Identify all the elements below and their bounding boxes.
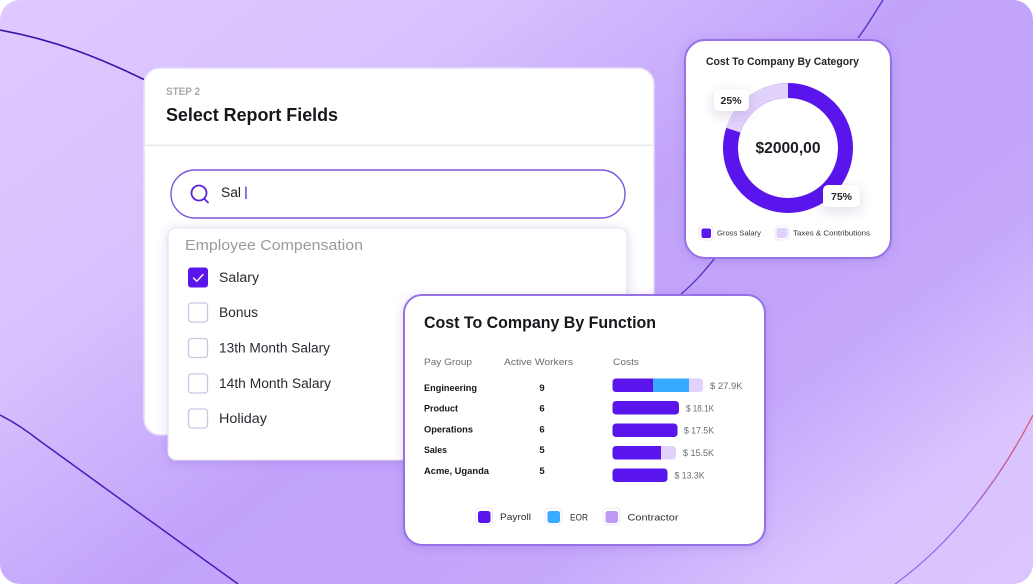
curve: top right line xyxy=(680,0,883,295)
cost values: $ 15.5K xyxy=(683,448,715,459)
pay group names: Operations xyxy=(424,424,473,434)
active worker counts xyxy=(539,383,545,477)
legend: gross salary xyxy=(699,226,761,240)
option: holiday xyxy=(188,409,267,428)
legend: payroll: Payroll xyxy=(500,512,531,523)
option: 13th month salary xyxy=(188,338,330,358)
pay group names: Sales xyxy=(424,445,447,455)
step label: STEP 2 xyxy=(166,86,200,98)
option: bonus: Bonus xyxy=(219,305,258,320)
active worker counts: 6 xyxy=(539,404,545,414)
cost values: $ 13.3K xyxy=(674,470,705,482)
curve: top left line xyxy=(0,30,145,80)
legend: contractor: Contractor xyxy=(628,512,678,524)
option: 14th month salary xyxy=(188,374,331,393)
pay group names: Product xyxy=(424,404,458,414)
legend: taxes and contributions: Taxes & Contributions xyxy=(793,228,870,238)
bar chart: costs xyxy=(612,378,703,482)
legend: contractor xyxy=(603,508,678,525)
heading: Select Report Fields xyxy=(166,104,338,125)
label: 75% xyxy=(823,185,860,207)
panel: select report fields xyxy=(144,68,654,435)
donut chart xyxy=(730,90,846,206)
pay group names xyxy=(424,383,490,476)
active worker counts: 5 xyxy=(539,466,545,477)
active worker counts: 5 xyxy=(539,445,545,456)
table header: Active Workers xyxy=(504,357,573,368)
label: 25%: 25% xyxy=(720,95,742,107)
option: 14th month salary: 14th Month Salary xyxy=(219,376,331,391)
table header: Costs xyxy=(613,357,639,368)
pay group names: Engineering xyxy=(424,383,477,393)
legend: taxes and contributions xyxy=(775,226,870,240)
panel: dropdown xyxy=(168,228,627,460)
cost values: $ 17.5K xyxy=(684,426,715,436)
label: 25% xyxy=(714,89,749,111)
option: bonus xyxy=(188,303,258,322)
pay group names: Acme, Uganda xyxy=(424,466,490,476)
option: holiday: Holiday xyxy=(219,411,267,426)
function heading: Cost To Company By Function xyxy=(424,314,656,332)
curve: bottom right line xyxy=(895,415,1033,584)
search field xyxy=(171,170,625,218)
panel: cost by function xyxy=(404,295,765,545)
cost values xyxy=(674,381,743,482)
legend: gross salary: Gross Salary xyxy=(717,228,761,238)
label: 75%: 75% xyxy=(831,191,853,203)
cost values: $ 27.9K xyxy=(710,381,743,392)
icon: search xyxy=(192,186,208,202)
donut total: $2000,00 xyxy=(756,140,820,157)
curve: bottom left line xyxy=(0,415,238,584)
cost values: $ 18.1K xyxy=(686,404,715,414)
panel: cost by category xyxy=(685,40,891,258)
table header: Pay Group xyxy=(424,357,472,368)
dropdown heading: Employee Compensation xyxy=(185,237,363,254)
legend: eor: EOR xyxy=(570,512,588,524)
option: salary checked xyxy=(188,268,259,288)
option: salary checked: Salary xyxy=(219,270,259,285)
option: 13th month salary: 13th Month Salary xyxy=(219,340,330,356)
active worker counts: 6 xyxy=(539,424,545,436)
legend: eor xyxy=(545,508,588,525)
category heading: Cost To Company By Category xyxy=(706,56,860,68)
legend: payroll xyxy=(476,508,531,525)
search text: Sal xyxy=(221,185,241,200)
table header xyxy=(424,357,639,368)
active worker counts: 9 xyxy=(539,383,545,394)
